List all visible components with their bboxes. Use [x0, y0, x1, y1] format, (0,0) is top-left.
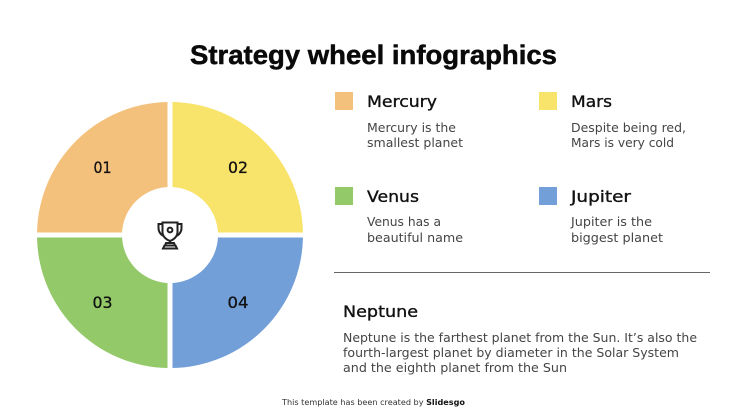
segment 02: 02: [228, 158, 248, 177]
title: Strategy wheel infographics: [190, 40, 557, 70]
text block: Neptune: fourth-largest planet by diameter in the Solar System: [343, 346, 679, 360]
legend: Mars: Mars is very cold: [571, 136, 674, 150]
legend: Mars: Mars: [571, 92, 612, 111]
legend: Venus: Venus has a: [367, 215, 441, 229]
legend: Mars: Despite being red,: [571, 121, 686, 135]
center hub: [122, 187, 218, 283]
legend: Jupiter: [539, 187, 663, 245]
strategy wheel: [37, 102, 303, 368]
legend: Jupiter: Jupiter: [570, 187, 631, 206]
legend: Mars: [539, 92, 686, 150]
segment 04: [172, 238, 303, 368]
text block: Neptune: Neptune is the farthest planet from the Sun. It’s also the: [343, 331, 697, 345]
segment 01: [37, 102, 167, 233]
legend: Jupiter: biggest planet: [571, 231, 663, 245]
segment 03: [37, 238, 167, 368]
legend: Mercury: Mercury is the: [367, 121, 456, 135]
icon: trophy: [158, 222, 182, 248]
segment 03: 03: [92, 293, 112, 312]
text block: Neptune: and the eighth planet from the Sun: [343, 361, 567, 375]
segment 04: 04: [228, 293, 248, 312]
segment 01: 01: [94, 158, 112, 177]
legend: Jupiter: Jupiter is the: [570, 215, 652, 229]
legend: Mercury: smallest planet: [367, 136, 463, 150]
text block: Neptune: [343, 302, 697, 375]
legend: Venus: beautiful name: [367, 231, 463, 245]
legend: Venus: [335, 187, 463, 245]
legend: Venus: Venus: [367, 187, 419, 206]
segment 02: [172, 102, 303, 233]
footer credit: This template has been created by Slidesgo: [281, 398, 465, 407]
legend: Mercury: Mercury: [367, 92, 437, 111]
text block: Neptune: Neptune: [343, 302, 418, 321]
legend: Mercury: [335, 92, 463, 150]
